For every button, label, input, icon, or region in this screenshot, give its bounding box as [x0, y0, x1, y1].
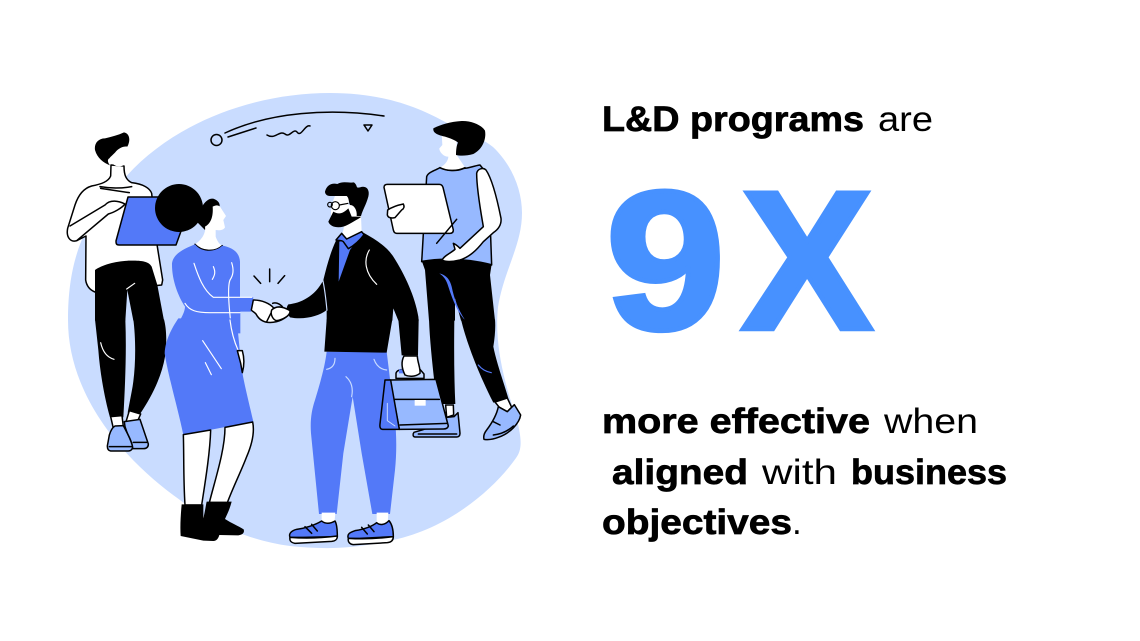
- text: closing statement: objectives: [602, 503, 792, 542]
- text: intro line: L&D programs: [602, 100, 864, 139]
- text: closing statement: more effective: [602, 402, 870, 441]
- figure: woman in blue dress: [155, 184, 290, 541]
- big stat: 9X: [606, 150, 873, 371]
- decorative sky marks: [211, 112, 384, 146]
- text: closing statement: aligned: [612, 453, 748, 492]
- text: closing statement: .: [792, 503, 802, 542]
- hair bun: [155, 184, 203, 232]
- text: closing statement: when: [883, 402, 978, 441]
- big stat: 9X: X: [741, 150, 873, 371]
- figure: bearded man with briefcase: [271, 182, 448, 545]
- handshake: [271, 307, 290, 321]
- icon: briefcase: [380, 356, 448, 429]
- background blob: [68, 93, 522, 548]
- text: intro line: are: [878, 100, 933, 139]
- text: closing statement: with: [761, 453, 837, 492]
- figure: man with blue tablet: [67, 132, 185, 451]
- figure: woman with white tablet: [384, 121, 521, 440]
- text: closing statement: [602, 402, 1007, 542]
- text: closing statement: business: [851, 453, 1007, 492]
- big stat: 9X: 9: [606, 150, 726, 371]
- icon: blue tablet: [116, 197, 185, 245]
